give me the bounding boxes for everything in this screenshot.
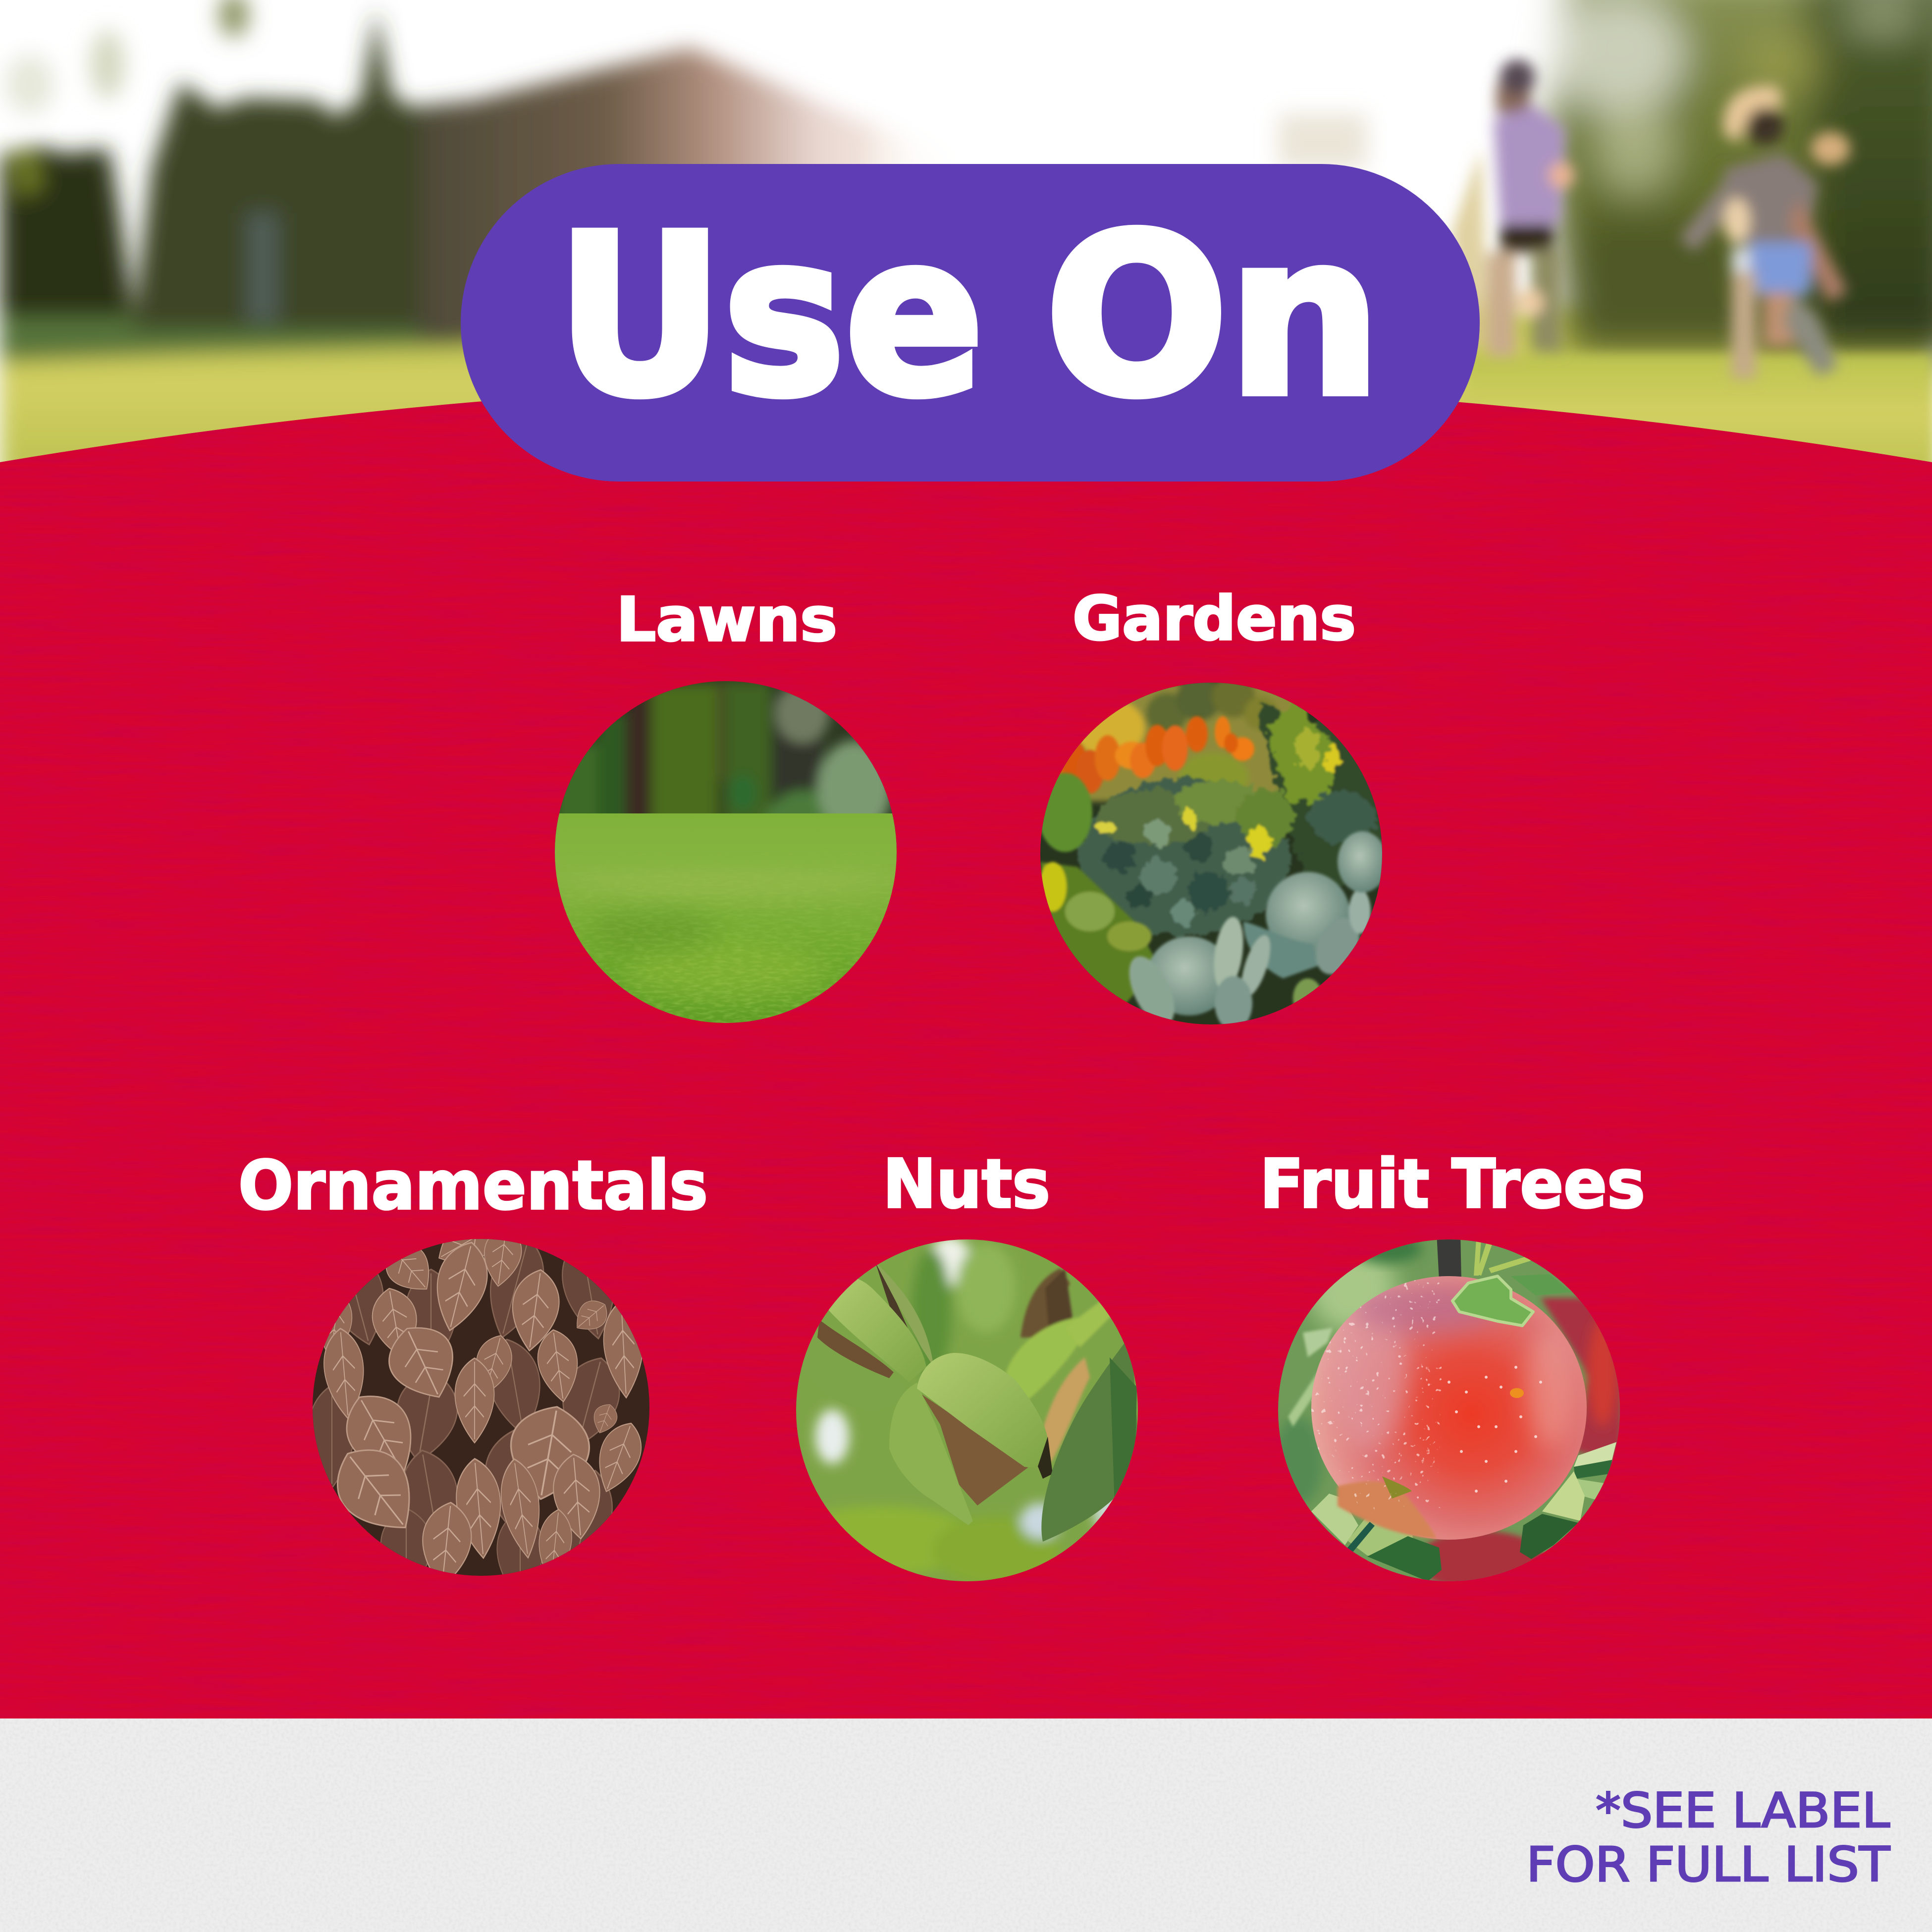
label: Nuts: Nuts [883, 1145, 1050, 1224]
background leaves [1006, 1268, 1115, 1471]
water droplets [1308, 1273, 1442, 1511]
peach [1311, 1276, 1587, 1540]
child figure in blue shorts [1679, 86, 1850, 379]
right leaf [1041, 1335, 1139, 1542]
label: Fruit Trees: Fruit Trees [1260, 1145, 1645, 1224]
category: Ornamentals [238, 1147, 708, 1601]
title text [557, 188, 1381, 444]
peach stem leaf [1511, 1274, 1571, 1295]
left nut husk [801, 1262, 934, 1411]
photo: bronze leaves [309, 1210, 650, 1601]
category: Fruit Trees [1260, 1145, 1645, 1590]
photo: lawn [555, 681, 897, 1026]
cabbages [1120, 831, 1387, 1032]
footnote: see label: FOR FULL LIST [1526, 1837, 1890, 1892]
category: Lawns [555, 585, 897, 1026]
right foliage [1258, 698, 1387, 887]
label: Gardens: Gardens [1073, 584, 1356, 654]
photo: green nut husks [783, 1236, 1139, 1585]
background photo: blurred yard with house and children [0, 0, 1932, 505]
photo: vegetable garden [1038, 674, 1387, 1032]
title pill [461, 164, 1480, 482]
footnote: see label: *SEE LABEL [1596, 1783, 1890, 1838]
bottom textured strip [0, 1718, 1932, 1932]
title text: On [1045, 188, 1381, 444]
centre nut husk [889, 1353, 1053, 1525]
left leafy greens [1038, 773, 1159, 1011]
label: Ornamentals: Ornamentals [238, 1147, 708, 1225]
title text: Use [557, 188, 984, 444]
foreground right lawn [1466, 355, 1932, 503]
red painted panel [0, 297, 1932, 1718]
category: Nuts [783, 1145, 1139, 1585]
category: Gardens [1038, 584, 1387, 1032]
kale mound [1077, 778, 1294, 936]
photo: peach on branch [1273, 1234, 1621, 1590]
label: Lawns: Lawns [616, 585, 837, 655]
footnote: see label [1526, 1783, 1890, 1892]
right tree line [1546, 0, 1932, 354]
orange flowers [1051, 716, 1254, 803]
child figure in lilac shirt [1451, 59, 1574, 357]
